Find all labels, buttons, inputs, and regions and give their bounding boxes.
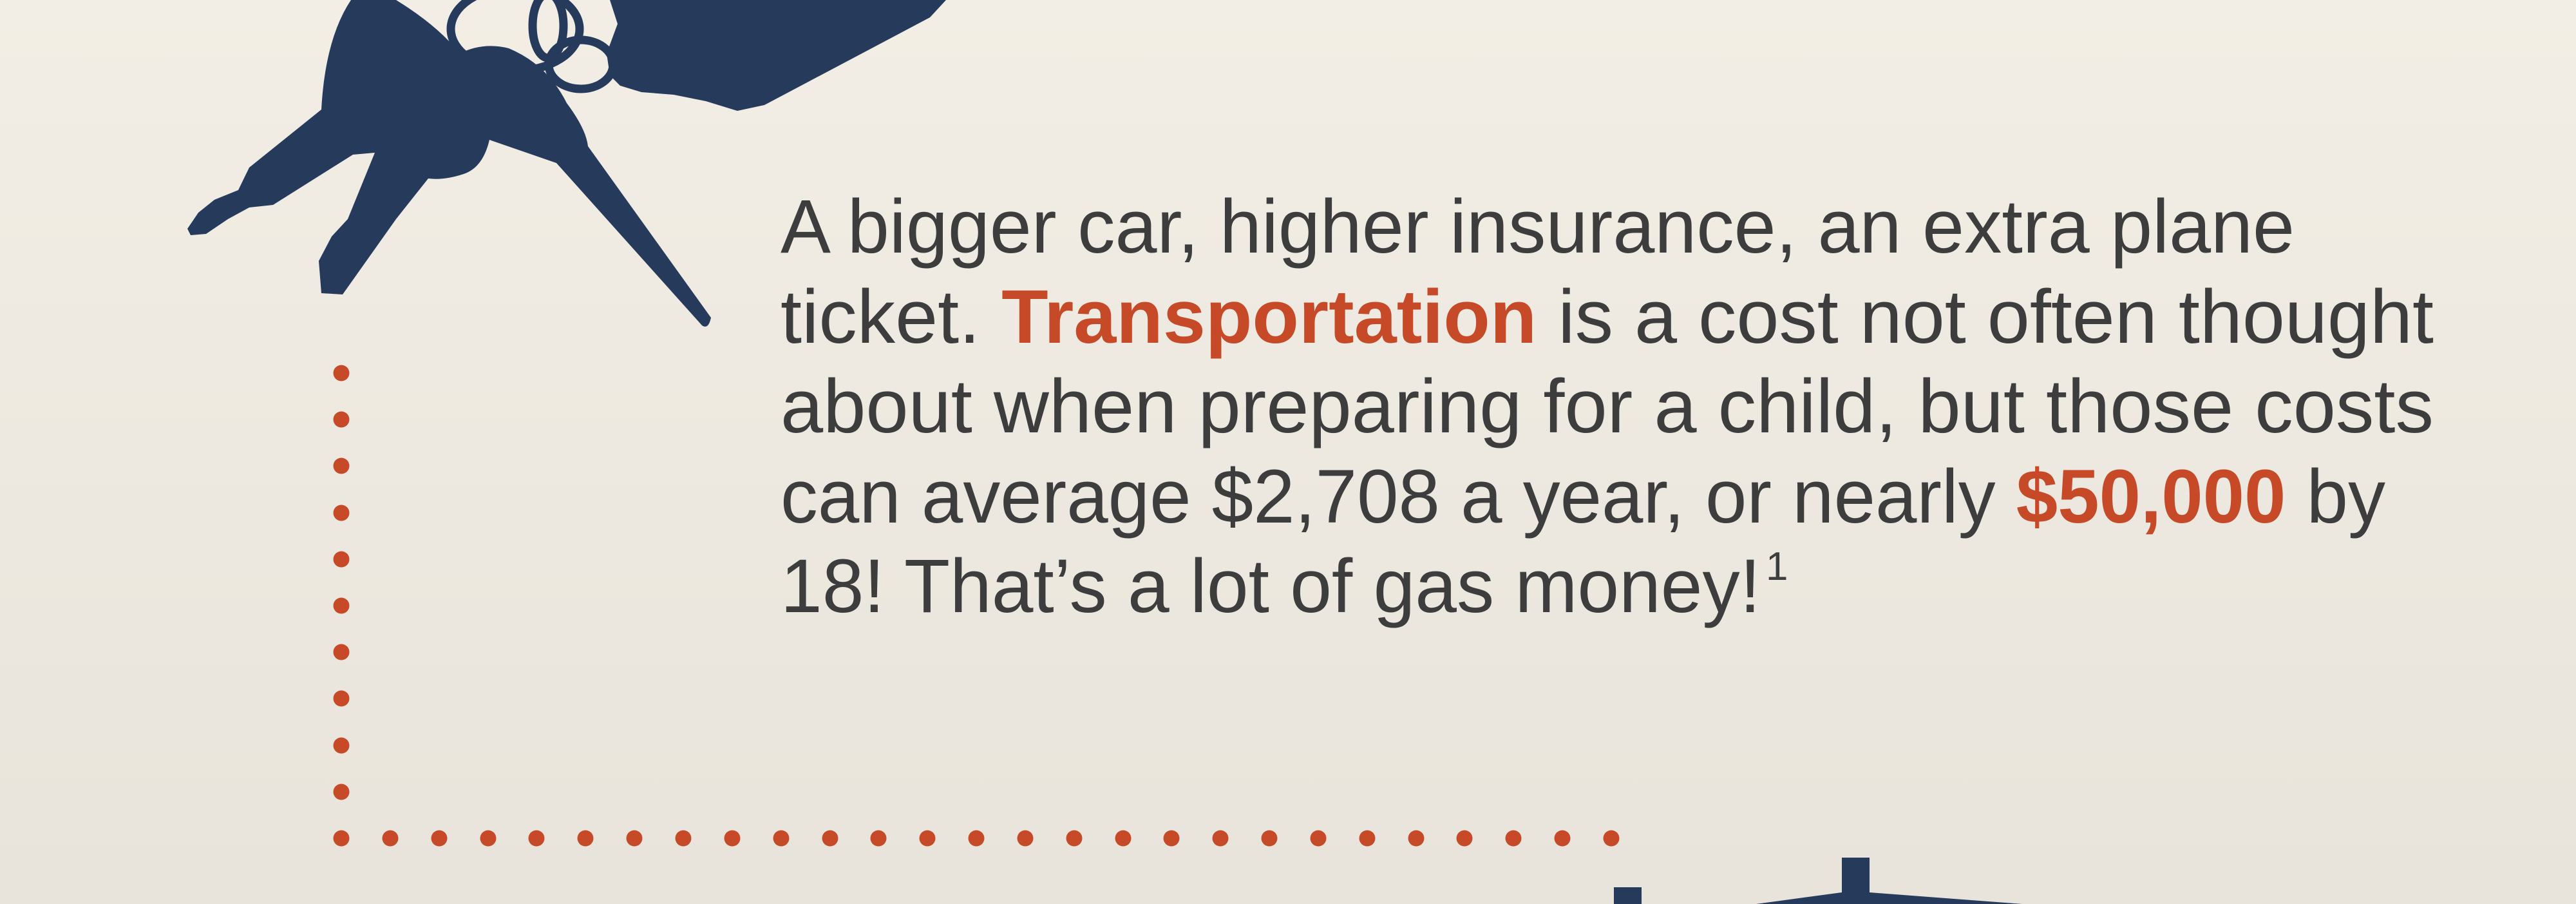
keys <box>187 0 711 327</box>
text block: transportation costs: A bigger car, higher insurance, an extra plane <box>781 184 2295 269</box>
text block: transportation costs <box>781 184 2434 629</box>
key rings <box>451 0 613 89</box>
icon: house rooftops <box>1614 858 2022 904</box>
key fob <box>607 0 946 111</box>
text block: transportation costs: can average $2,708 a year, or nearly $50,000 by <box>781 454 2385 539</box>
text block: transportation costs: 1 <box>1766 544 1788 589</box>
text block: transportation costs: about when preparing for a child, but those costs <box>781 364 2434 449</box>
text block: transportation costs: 18! That’s a lot of gas money! <box>781 544 1761 629</box>
dotted connector line <box>334 365 1619 847</box>
text block: transportation costs: ticket. Transportation is a cost not often thought <box>781 274 2434 360</box>
icon: car keys <box>187 0 946 327</box>
